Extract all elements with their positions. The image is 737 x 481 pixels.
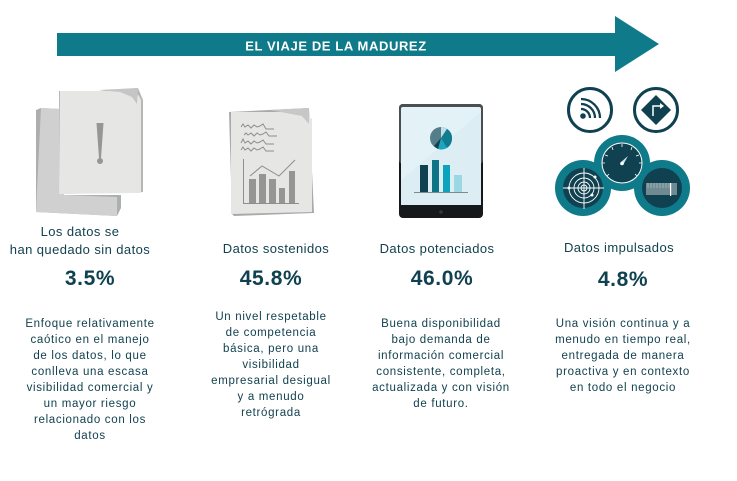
bars xyxy=(420,165,428,192)
column 4 description: en todo el negocio xyxy=(570,382,676,394)
icon: road sign circle xyxy=(634,88,678,132)
column 1 heading: han quedado sin datos xyxy=(10,242,150,257)
column 2 description: visibilidad xyxy=(242,359,300,371)
column 3 description: consistente, completa, xyxy=(376,366,506,378)
column 1 description: un mayor riesgo xyxy=(44,398,136,410)
column 3 description: Buena disponibilidad xyxy=(381,318,501,330)
column 2 percentage: 45.8% xyxy=(240,267,302,290)
column 3 description: información comercial xyxy=(378,350,504,362)
column 2 description xyxy=(211,311,331,419)
column 1 description: datos xyxy=(74,430,106,442)
column 3 description: de futuro. xyxy=(413,398,469,410)
icon: ruler gauge xyxy=(634,160,690,216)
icon: wifi signal circle xyxy=(568,88,612,132)
column 1 description: visibilidad comercial y xyxy=(27,382,153,394)
column 1 description: caótico en el manejo xyxy=(30,334,150,346)
icon: radar gauge xyxy=(555,160,611,216)
column 4 description: entregada de manera xyxy=(562,350,684,362)
column 3 heading: Datos potenciados xyxy=(380,241,494,256)
column 1 description: relacionado con los xyxy=(34,414,146,426)
column 4 description: Una visión continua y a xyxy=(556,318,690,330)
pie chart xyxy=(430,127,452,150)
column 2 description: básica, pero una xyxy=(223,343,319,355)
arrow: journey xyxy=(57,16,659,72)
bars xyxy=(249,171,295,204)
column 2 heading: Datos sostenidos xyxy=(223,241,329,256)
arrow title: EL VIAJE DE LA MADUREZ xyxy=(245,38,427,54)
column 1 description xyxy=(25,318,155,442)
column 4 percentage: 4.8% xyxy=(598,268,648,291)
column 3 description xyxy=(372,318,510,410)
column 1 description: conlleva una escasa xyxy=(31,366,149,378)
icon: speedometer gauge xyxy=(602,143,642,183)
column 2 description: de competencia xyxy=(226,327,316,339)
column 2 description: Un nivel respetable xyxy=(215,311,327,323)
column 2 description: empresarial desigual xyxy=(211,375,331,387)
column 1 description: Enfoque relativamente xyxy=(25,318,155,330)
column 4 description xyxy=(555,318,691,394)
column 1 heading: Los datos se xyxy=(41,224,119,239)
column 1 heading xyxy=(10,224,150,257)
icon: blank papers with exclamation mark xyxy=(36,88,143,216)
icon: gauge backing disc xyxy=(594,135,650,191)
column 3 description: bajo demanda de xyxy=(391,334,491,346)
column 4 heading: Datos impulsados xyxy=(564,240,674,255)
column 3 description: actualizada y con visión xyxy=(372,382,510,394)
icon: report with line and bar chart xyxy=(229,108,314,216)
scribbled text lines xyxy=(241,124,277,151)
column 2 description: retrógrada xyxy=(241,407,301,419)
icon: tablet with charts xyxy=(399,104,483,218)
column 1 percentage: 3.5% xyxy=(65,267,115,290)
column 1 description: de los datos, lo que xyxy=(33,350,147,362)
column 2 description: y a menudo xyxy=(238,391,304,403)
column 4 description: menudo en tiempo real, xyxy=(555,334,691,346)
column 4 description: proactiva y en contexto xyxy=(556,366,690,378)
column 3 percentage: 46.0% xyxy=(411,267,473,290)
